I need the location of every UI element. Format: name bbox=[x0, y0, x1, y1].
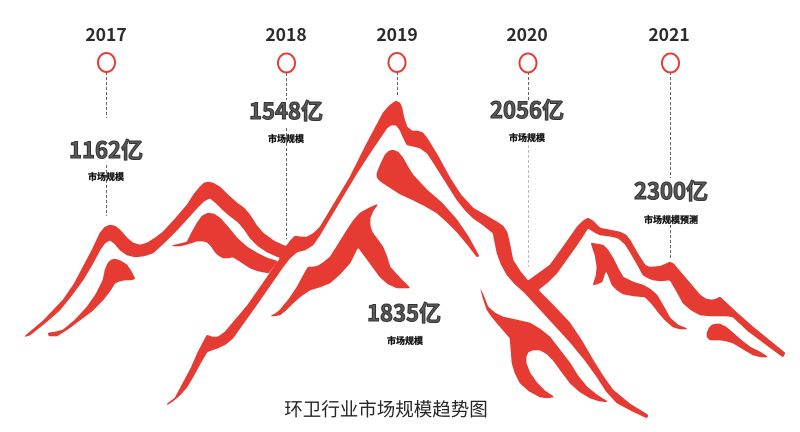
value 2018: 1548亿 bbox=[249, 94, 323, 126]
value 2017: 市场规模 bbox=[88, 170, 124, 183]
left mountain inner peak bbox=[170, 213, 277, 273]
timeline node 2020 bbox=[506, 22, 548, 72]
timeline node 2019 bbox=[376, 22, 418, 72]
value 2018 bbox=[249, 94, 323, 145]
left mountain ridge bbox=[24, 182, 290, 337]
right mountain small foothill bbox=[707, 324, 768, 357]
right mountain inner ridge bbox=[591, 243, 688, 329]
value 2020: 市场规模 bbox=[509, 131, 545, 144]
central and right mountain ridge bbox=[167, 101, 785, 418]
mountain range bbox=[24, 101, 785, 418]
central mountain lower inner peak bbox=[270, 204, 410, 316]
chart title: 环卫行业市场规模趋势图 bbox=[284, 396, 488, 422]
lower forked mountain bbox=[480, 287, 608, 402]
value 2019: 1835亿 bbox=[367, 296, 441, 328]
timeline node 2019: 2019 bbox=[376, 22, 418, 47]
central mountain upper inner peak bbox=[377, 150, 479, 257]
timeline node 2017 bbox=[85, 22, 127, 72]
timeline node 2021 bbox=[648, 22, 690, 72]
value 2021 forecast: 2300亿 bbox=[634, 174, 708, 206]
timeline node 2018: 2018 bbox=[265, 22, 307, 47]
value 2017 bbox=[69, 133, 143, 183]
value 2019 bbox=[367, 296, 441, 347]
left mountain small foothill bbox=[48, 259, 135, 336]
value 2021 forecast bbox=[634, 174, 708, 226]
timeline node 2018 bbox=[265, 22, 307, 72]
value 2018: 市场规模 bbox=[268, 132, 304, 145]
timeline node 2020: 2020 bbox=[506, 22, 548, 47]
value 2021 forecast: 市场规模预测 bbox=[644, 213, 698, 226]
value 2020 bbox=[490, 93, 564, 144]
timeline node 2017: 2017 bbox=[85, 22, 127, 47]
dashed leader lines bbox=[106, 72, 670, 267]
value 2017: 1162亿 bbox=[69, 133, 143, 165]
value 2019: 市场规模 bbox=[387, 334, 423, 347]
timeline node 2021: 2021 bbox=[648, 22, 690, 47]
value 2020: 2056亿 bbox=[490, 93, 564, 125]
